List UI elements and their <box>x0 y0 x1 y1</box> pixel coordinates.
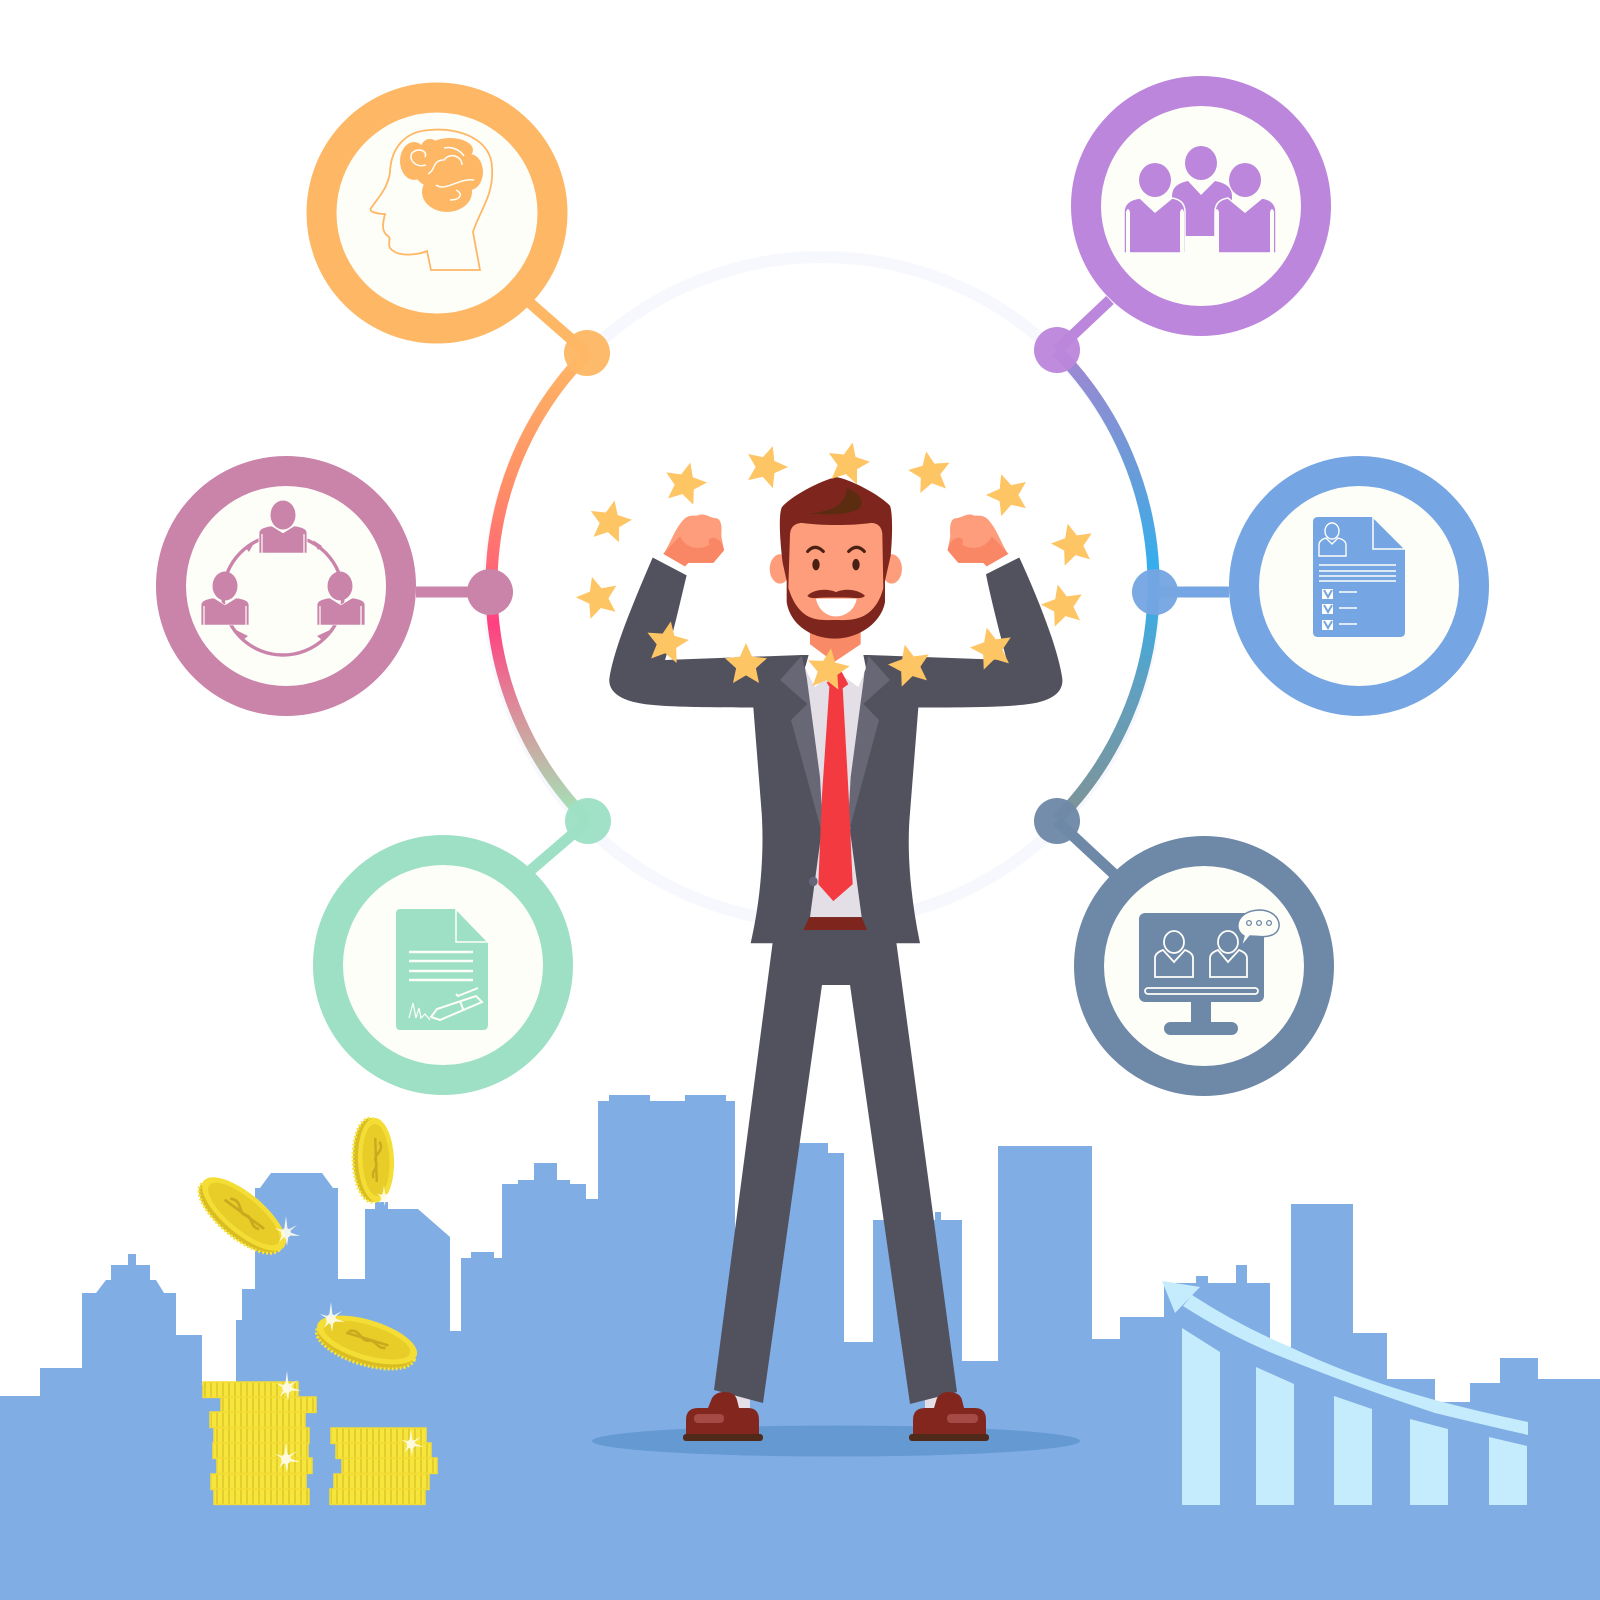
face <box>788 523 883 620</box>
panel: orange brain circle <box>322 98 552 328</box>
tie <box>818 672 853 901</box>
neck <box>810 631 861 662</box>
icon: right person <box>317 572 365 625</box>
left eye and brow <box>808 547 823 570</box>
right eye and brow <box>849 547 864 570</box>
icon: brain <box>400 138 483 212</box>
jacket button <box>809 877 818 886</box>
right shoe <box>909 1392 989 1441</box>
ground shadow <box>592 1426 1080 1456</box>
businessman upper body <box>609 477 1062 943</box>
right lapel <box>847 656 890 838</box>
left shoe <box>683 1392 763 1441</box>
jacket and arms <box>609 557 1062 943</box>
falling coin bottom <box>310 1306 423 1379</box>
icon: left person <box>201 572 249 625</box>
shirt <box>805 666 865 917</box>
panel: blue resume circle <box>1244 471 1474 701</box>
ears <box>770 554 902 584</box>
sparkles <box>275 1185 424 1472</box>
panel: slate online meeting circle <box>1089 851 1319 1081</box>
panel: mint contract circle <box>328 850 558 1080</box>
icon: signed contract <box>396 909 488 1030</box>
coin stack left <box>203 1382 316 1504</box>
bar chart <box>1182 1328 1527 1505</box>
falling coin left <box>188 1165 297 1267</box>
falling coin top <box>352 1117 395 1203</box>
coin stack right <box>330 1428 437 1504</box>
central ring <box>489 257 1155 923</box>
soul patch <box>831 620 841 631</box>
icon: monitor with two people <box>1139 910 1279 1035</box>
connector dots <box>467 327 1178 844</box>
icon: resume document <box>1313 517 1405 637</box>
panel: pink team cycle circle <box>171 471 401 701</box>
left lapel <box>780 656 823 838</box>
hair and beard <box>780 477 892 639</box>
right fist <box>948 514 1008 566</box>
hair shadow <box>810 488 862 514</box>
icon: cycle arrows <box>236 540 330 640</box>
collar <box>805 638 866 687</box>
belt <box>803 917 867 930</box>
connectors <box>416 300 1229 874</box>
star halo <box>572 438 1098 691</box>
panel: purple group circle <box>1086 91 1316 321</box>
businessman legs <box>714 940 957 1408</box>
smile <box>816 599 857 616</box>
icon: top person <box>259 500 307 553</box>
growth arrow <box>1162 1281 1528 1435</box>
left fist <box>663 514 724 566</box>
city skyline <box>0 1095 1600 1600</box>
icon: group of three <box>1124 146 1276 253</box>
mustache <box>807 590 865 598</box>
